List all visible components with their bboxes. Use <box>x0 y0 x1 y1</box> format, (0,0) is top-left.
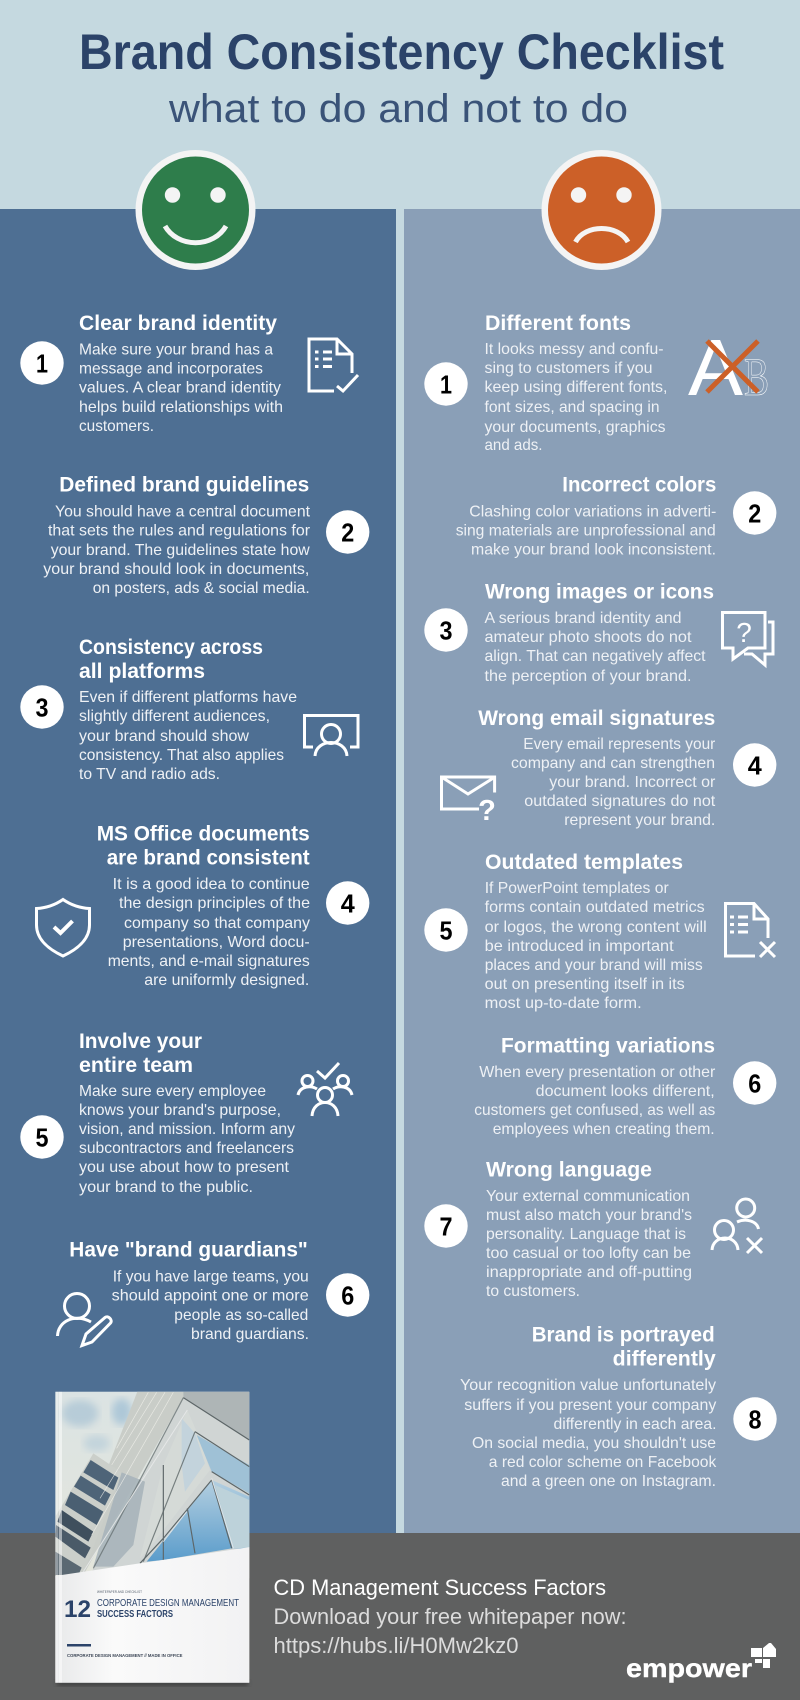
item: don't 2 incorrect colors: Clashing color variations in adverti- <box>469 503 716 520</box>
item: don't 8 brand is portrayed differently <box>460 1324 777 1490</box>
footer call to action: CD Management Success Factors <box>274 1575 606 1600</box>
icon: document with cross <box>726 904 775 957</box>
item: don't 8 brand is portrayed differently: Your recognition value unfortunately <box>460 1377 716 1394</box>
icon: people with cross <box>712 1199 762 1253</box>
item: don't 5 outdated templates: most up-to-date form. <box>485 995 642 1012</box>
whitepaper book cover <box>55 1392 250 1686</box>
icon: speech bubbles with question mark <box>722 612 773 665</box>
item: don't 4 wrong email signatures: company and can strengthen <box>511 755 715 772</box>
item: don't 3 wrong images or icons <box>424 581 773 685</box>
book cover text <box>64 1590 239 1658</box>
item: don't 7 wrong language: too casual or too lofty can be <box>486 1245 691 1262</box>
item: do 6 brand guardians <box>58 1239 369 1346</box>
item: do 1 clear brand identity: Clear brand identity <box>79 312 277 335</box>
item: do 3 consistency across platforms: your brand should show <box>79 728 249 745</box>
item: don't 1 different fonts: It looks messy and confu- <box>484 341 664 358</box>
item: don't 8 brand is portrayed differently: Brand is portrayed <box>532 1324 715 1347</box>
icon: crossed-out letters AB <box>688 323 769 412</box>
item: do 2 defined brand guidelines: that sets the rules and regulations for <box>48 523 311 540</box>
item: do 3 consistency across platforms <box>20 636 358 783</box>
item: do 5 involve your entire team: knows your brand's purpose, <box>79 1102 281 1119</box>
item: don't 6 formatting variations: customers get confused, as well as <box>474 1102 715 1119</box>
item: don't 6 formatting variations: Formatting variations <box>501 1035 715 1058</box>
item: don't 3 wrong images or icons: 3 <box>440 616 452 646</box>
icon: speech bubbles with question mark: ? <box>736 617 752 648</box>
item: do 5 involve your entire team: entire team <box>79 1054 193 1077</box>
item: don't 2 incorrect colors: make your brand look inconsistent. <box>471 541 716 558</box>
item: don't 6 formatting variations <box>474 1035 776 1138</box>
panel: footer background <box>0 1533 800 1700</box>
item: do 5 involve your entire team: subcontractors and freelancers <box>79 1140 294 1157</box>
item: do 2 defined brand guidelines: You should have a central document <box>55 503 311 520</box>
item: do 2 defined brand guidelines: on posters, ads & social media. <box>93 580 310 597</box>
icon: shield with check <box>36 900 90 956</box>
item: don't 3 wrong images or icons: align. That can negatively affect <box>484 648 706 665</box>
item: do 4 ms office documents <box>36 823 369 989</box>
item: do 4 ms office documents: MS Office documents <box>97 823 310 846</box>
item: don't 4 wrong email signatures: 4 <box>748 750 762 780</box>
item: don't 3 wrong images or icons: the perception of your brand. <box>484 668 692 685</box>
item: don't 7 wrong language: Wrong language <box>486 1159 652 1182</box>
item: do 1 clear brand identity <box>20 312 358 435</box>
item: don't 2 incorrect colors: sing materials are unprofessional and <box>456 522 716 539</box>
icon: envelope with question mark: ? <box>478 795 496 827</box>
item: don't 8 brand is portrayed differently: and a green one on Instagram. <box>501 1473 716 1490</box>
item: don't 7 wrong language: to customers. <box>486 1283 580 1300</box>
item: do 4 ms office documents: the design principles of the <box>119 895 310 912</box>
item: don't 4 wrong email signatures: outdated signatures do not <box>524 793 716 810</box>
item: do 3 consistency across platforms: to TV and radio ads. <box>79 766 220 783</box>
item: do 5 involve your entire team: Involve your <box>79 1030 202 1053</box>
logo: empower: empower <box>626 1653 752 1683</box>
item: do 4 ms office documents: 4 <box>341 888 355 918</box>
item: do 2 defined brand guidelines: your brand should look in documents, <box>43 561 309 578</box>
item: don't 8 brand is portrayed differently: a red color scheme on Facebook <box>489 1454 717 1471</box>
item: do 1 clear brand identity: values. A clear brand identity <box>79 380 281 396</box>
icon: person in frame <box>304 716 358 756</box>
item: do 5 involve your entire team: your brand to the public. <box>79 1179 253 1196</box>
icon: person with pencil <box>58 1294 111 1346</box>
item: don't 5 outdated templates: be introduced in important <box>485 938 674 955</box>
icon: crossed-out letters AB: B <box>744 347 769 407</box>
item: do 3 consistency across platforms: slightly different audiences, <box>79 708 270 725</box>
item: don't 7 wrong language: inappropriate and off-putting <box>486 1264 692 1281</box>
item: don't 8 brand is portrayed differently: 8 <box>748 1404 762 1434</box>
item: don't 3 wrong images or icons: amateur photo shoots do not <box>484 629 692 646</box>
item: don't 2 incorrect colors: 2 <box>748 498 761 528</box>
item: do 1 clear brand identity: message and incorporates <box>79 360 263 377</box>
item: don't 6 formatting variations: 6 <box>748 1068 761 1098</box>
icon: crossed-out letters AB: A <box>688 323 744 412</box>
item: do 4 ms office documents: It is a good idea to continue <box>113 876 310 893</box>
item: do 2 defined brand guidelines <box>43 474 369 597</box>
item: don't 1 different fonts: and ads. <box>484 437 542 454</box>
item: don't 1 different fonts <box>424 312 769 454</box>
book cover text: 12 <box>64 1596 91 1623</box>
item: don't 5 outdated templates: If PowerPoint templates or <box>485 880 669 897</box>
item: do 4 ms office documents: are brand consistent <box>107 847 310 870</box>
icon: envelope with question mark <box>442 777 496 827</box>
item: do 4 ms office documents: ments, and e-mail signatures <box>108 953 310 970</box>
item: do 4 ms office documents: are uniformly designed. <box>144 972 309 989</box>
item: don't 5 outdated templates: 5 <box>440 916 452 946</box>
item: don't 7 wrong language <box>424 1159 762 1300</box>
icon: team with check <box>298 1063 352 1116</box>
item: don't 8 brand is portrayed differently: On social media, you shouldn't use <box>472 1435 716 1452</box>
item: do 6 brand guardians: If you have large teams, you <box>113 1269 309 1286</box>
item: don't 5 outdated templates <box>424 851 775 1012</box>
item: don't 2 incorrect colors <box>456 474 776 558</box>
item: don't 5 outdated templates: or logos, the wrong content will <box>485 919 707 936</box>
item: do 5 involve your entire team <box>20 1030 352 1196</box>
item: do 1 clear brand identity: customers. <box>79 418 154 435</box>
item: do 6 brand guardians: Have "brand guardians" <box>69 1239 308 1262</box>
item: don't 1 different fonts: Different fonts <box>485 312 631 335</box>
book cover text: CORPORATE DESIGN MANAGEMENT // MADE IN OFFICE <box>67 1653 182 1658</box>
item: do 4 ms office documents: company so that company <box>124 915 310 932</box>
item: do 1 clear brand identity: Make sure your brand has a <box>79 341 273 358</box>
item: do 6 brand guardians: people as so-called <box>174 1307 308 1324</box>
item: do 5 involve your entire team: Make sure every employee <box>79 1083 266 1100</box>
item: don't 1 different fonts: your documents, graphics <box>484 419 666 436</box>
panel: don't column background <box>404 209 800 1533</box>
panel: do column background <box>0 209 396 1533</box>
footer call to action: https://hubs.li/H0Mw2kz0 <box>274 1633 518 1658</box>
item: do 3 consistency across platforms: all platforms <box>79 660 205 683</box>
item: don't 7 wrong language: Your external communication <box>486 1188 690 1205</box>
item: do 4 ms office documents: presentations, Word docu- <box>123 934 310 951</box>
title: Brand Consistency Checklist <box>79 24 724 80</box>
item: do 6 brand guardians: 6 <box>341 1280 354 1310</box>
item: do 5 involve your entire team: vision, and mission. Inform any <box>79 1121 295 1138</box>
item: don't 1 different fonts: keep using different fonts, <box>484 379 668 396</box>
item: do 3 consistency across platforms: 3 <box>36 692 48 722</box>
item: don't 5 outdated templates: Outdated templates <box>485 851 683 874</box>
item: do 5 involve your entire team: 5 <box>36 1122 48 1152</box>
item: don't 4 wrong email signatures: Wrong email signatures <box>478 707 715 730</box>
book cover text: SUCCESS FACTORS <box>97 1608 173 1620</box>
item: don't 4 wrong email signatures: Every email represents your <box>523 736 716 753</box>
item: don't 7 wrong language: must also match your brand's <box>486 1207 692 1224</box>
item: do 1 clear brand identity: helps build relationships with <box>79 399 283 416</box>
book cover text: CORPORATE DESIGN MANAGEMENT <box>97 1597 239 1609</box>
footer call to action: Download your free whitepaper now: <box>274 1604 626 1629</box>
item: don't 5 outdated templates: out on presenting itself in its <box>485 976 685 993</box>
item: don't 4 wrong email signatures: represent your brand. <box>564 812 715 829</box>
item: do 3 consistency across platforms: Consistency across <box>79 636 263 659</box>
item: don't 8 brand is portrayed differently: suffers if you present your company <box>464 1397 716 1414</box>
item: don't 6 formatting variations: employees when creating them. <box>493 1121 715 1138</box>
item: don't 1 different fonts: 1 <box>440 370 452 400</box>
icon: checklist document <box>309 339 358 391</box>
item: do 3 consistency across platforms: consistency. That also applies <box>79 747 284 764</box>
item: do 1 clear brand identity: 1 <box>36 348 48 378</box>
item: do 6 brand guardians: should appoint one or more <box>112 1288 309 1305</box>
item: don't 7 wrong language: 7 <box>440 1212 452 1242</box>
footer call to action <box>274 1575 626 1658</box>
item: do 3 consistency across platforms: Even if different platforms have <box>79 689 297 706</box>
item: don't 6 formatting variations: document looks different, <box>536 1083 715 1100</box>
item: don't 3 wrong images or icons: A serious brand identity and <box>484 610 682 627</box>
item: don't 8 brand is portrayed differently: differently in each area. <box>554 1416 716 1433</box>
icon: sad face <box>542 150 662 270</box>
item: don't 4 wrong email signatures: your brand. Incorrect or <box>549 774 716 791</box>
book cover text: WHITEPAPER AND CHECKLIST <box>97 1590 143 1594</box>
item: don't 3 wrong images or icons: Wrong images or icons <box>485 581 714 604</box>
item: do 6 brand guardians: brand guardians. <box>191 1326 309 1343</box>
item: don't 5 outdated templates: places and your brand will miss <box>485 957 703 974</box>
icon: happy face <box>136 150 256 270</box>
item: do 5 involve your entire team: you use about how to present <box>79 1159 290 1176</box>
item: don't 8 brand is portrayed differently: differently <box>613 1348 716 1371</box>
item: do 2 defined brand guidelines: Defined brand guidelines <box>59 474 309 497</box>
item: do 2 defined brand guidelines: your brand. The guidelines state how <box>51 542 310 559</box>
item: don't 1 different fonts: font sizes, and spacing in <box>484 399 660 416</box>
logo: empower <box>626 1643 776 1683</box>
item: don't 7 wrong language: personality. Language that is <box>486 1226 686 1243</box>
subtitle: what to do and not to do <box>168 87 628 131</box>
item: don't 1 different fonts: sing to customers if you <box>484 360 652 377</box>
item: do 2 defined brand guidelines: 2 <box>341 518 354 548</box>
item: don't 4 wrong email signatures <box>442 707 776 829</box>
item: don't 5 outdated templates: forms contain outdated metrics <box>485 899 705 916</box>
item: don't 2 incorrect colors: Incorrect colors <box>562 474 716 497</box>
item: don't 6 formatting variations: When every presentation or other <box>479 1064 716 1081</box>
